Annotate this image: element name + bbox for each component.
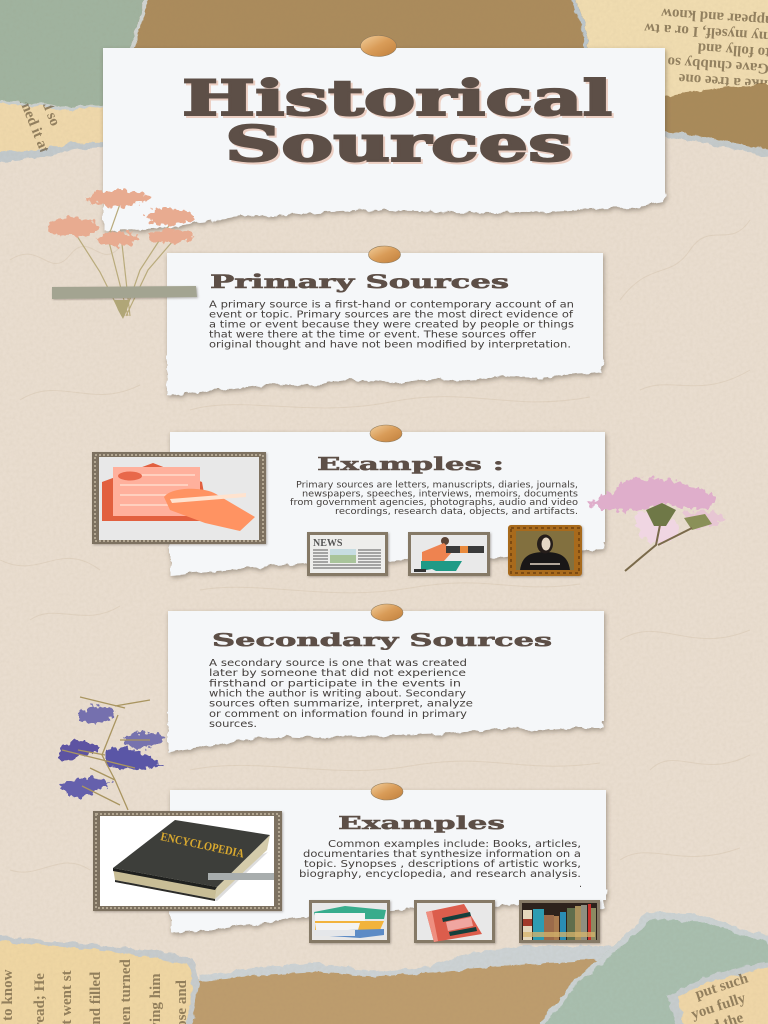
picture: bookshelf	[519, 900, 600, 943]
primary body text	[209, 300, 574, 350]
secondary heading: Secondary Sources	[212, 630, 552, 651]
secondary card paper	[168, 611, 604, 753]
icon: secondary pin	[371, 604, 403, 621]
title: Sources	[225, 115, 572, 173]
torn paper collage: top	[0, 0, 768, 162]
torn paper collage: bottom	[0, 912, 768, 1024]
newsprint text top right: my myself, I or a tw	[644, 19, 768, 44]
examples body text: newspapers, speeches, interviews, memoirs, documents	[302, 490, 579, 500]
examples body text: recordings, research data, objects, and artifacts.	[335, 507, 578, 517]
picture: encyclopedia: ENCYCLOPEDIA	[159, 829, 246, 861]
title: Historical	[184, 71, 614, 129]
examples body text: Primary sources are letters, manuscripts, diaries, journals,	[296, 480, 578, 490]
newsprint text bottom right: put such	[693, 970, 751, 1003]
newsprint text top right: like a tree one	[678, 70, 768, 92]
newsprint text top left: filled so	[29, 77, 63, 128]
newsprint top left	[0, 101, 106, 157]
title: Sources	[227, 117, 574, 175]
brown paper top right	[660, 80, 768, 153]
examples card paper	[170, 432, 605, 575]
illustration: peach dried flowers with tape	[47, 190, 197, 319]
icon: title pin	[360, 36, 396, 56]
brown paper top middle	[120, 0, 590, 60]
picture: framed portrait	[508, 525, 582, 576]
primary body text: A primary source is a first-hand or contemporary account of an	[209, 300, 574, 310]
secondary body text: firsthand or participate in the events in	[209, 678, 461, 690]
secondary body text: A secondary source is one that was created	[209, 658, 467, 669]
newsprint text bottom right: you fully	[689, 990, 748, 1023]
icon: examples pin	[370, 425, 402, 442]
picture: encyclopedia	[93, 811, 282, 911]
primary heading: Primary Sources	[210, 271, 509, 293]
picture: hand writing a letter	[92, 452, 266, 544]
rose calyx and stem	[646, 503, 676, 526]
newsprint text top left: in t	[45, 68, 68, 94]
icon: secondary examples pin	[371, 783, 403, 800]
rose petals	[588, 478, 725, 544]
primary card paper	[167, 253, 603, 396]
panel: primary sources	[167, 246, 603, 396]
primary body text: that were there at the time or event. These sources offer	[209, 330, 536, 340]
secondary body text: or comment on information found in primary	[209, 709, 468, 720]
picture: book stack	[309, 900, 390, 943]
newsprint text bottom right	[691, 974, 749, 1024]
secondary body text	[209, 658, 473, 730]
secondary examples body text: Common examples include: Books, articles,	[328, 839, 581, 850]
panel: title card	[103, 36, 665, 232]
torn shapes top	[0, 0, 768, 162]
newsprint top right	[570, 0, 768, 96]
secondary examples body text: biography, encyclopedia, and research analysis.	[299, 869, 581, 880]
flower heads	[47, 190, 194, 246]
newsprint text top right	[644, 8, 768, 86]
green paper bottom	[525, 915, 768, 1024]
panel: secondary sources	[168, 604, 604, 753]
examples body text: from government agencies, photographs, audio and video	[290, 498, 578, 508]
title	[182, 69, 614, 175]
secondary examples heading: Examples	[338, 813, 505, 834]
brown paper bottom	[186, 958, 600, 1024]
flower stems	[77, 204, 172, 316]
primary body text: original thought and have not been modified by interpretation.	[209, 340, 571, 350]
newsprint bottom right	[672, 962, 768, 1024]
panel: secondary examples	[170, 783, 606, 933]
purple petals	[58, 705, 164, 797]
primary body text: a time or event because they were created by people or things	[209, 320, 574, 330]
background marble veins	[0, 220, 750, 872]
purple stems	[62, 697, 150, 810]
secondary body text: sources often summarize, interpret, analyze	[209, 698, 473, 710]
secondary examples body text: documentaries that synthesize information on a	[303, 849, 581, 860]
secondary body text: later by someone that did not experience	[209, 668, 466, 679]
secondary body text: sources.	[209, 719, 257, 730]
picture: newspaper	[307, 532, 388, 576]
examples heading: Examples :	[317, 454, 504, 475]
newsprint text bottom left	[0, 958, 190, 1024]
picture: photographer	[408, 532, 490, 576]
newsprint text top right: Gave chubby so	[667, 53, 768, 76]
torn shapes bottom	[0, 912, 768, 1024]
picture: newspaper: NEWS	[313, 538, 343, 549]
illustration: purple pressed flowers	[58, 697, 164, 810]
primary body text: event or topic. Primary sources are the most direct evidence of	[209, 310, 574, 320]
title card paper	[103, 48, 665, 232]
picture: red book	[414, 900, 495, 943]
secondary examples body text: .	[579, 879, 582, 890]
secondary examples body text: topic. Synopses , descriptions of artistic works,	[304, 859, 581, 870]
illustration: pink rose	[588, 478, 725, 571]
newsprint bottom left	[0, 937, 198, 1024]
washi tape	[52, 286, 197, 299]
newsprint text top left	[20, 102, 58, 152]
secondary examples body text	[299, 839, 582, 890]
panel: primary examples	[170, 425, 605, 575]
examples body text	[290, 480, 579, 517]
green paper top	[0, 0, 148, 108]
secondary examples card paper	[170, 790, 606, 933]
secondary body text: which the author is writing about. Secondary	[209, 688, 467, 700]
icon: primary pin	[368, 246, 400, 263]
newsprint text top left: turned it at	[10, 82, 52, 155]
title: Historical	[182, 69, 612, 127]
